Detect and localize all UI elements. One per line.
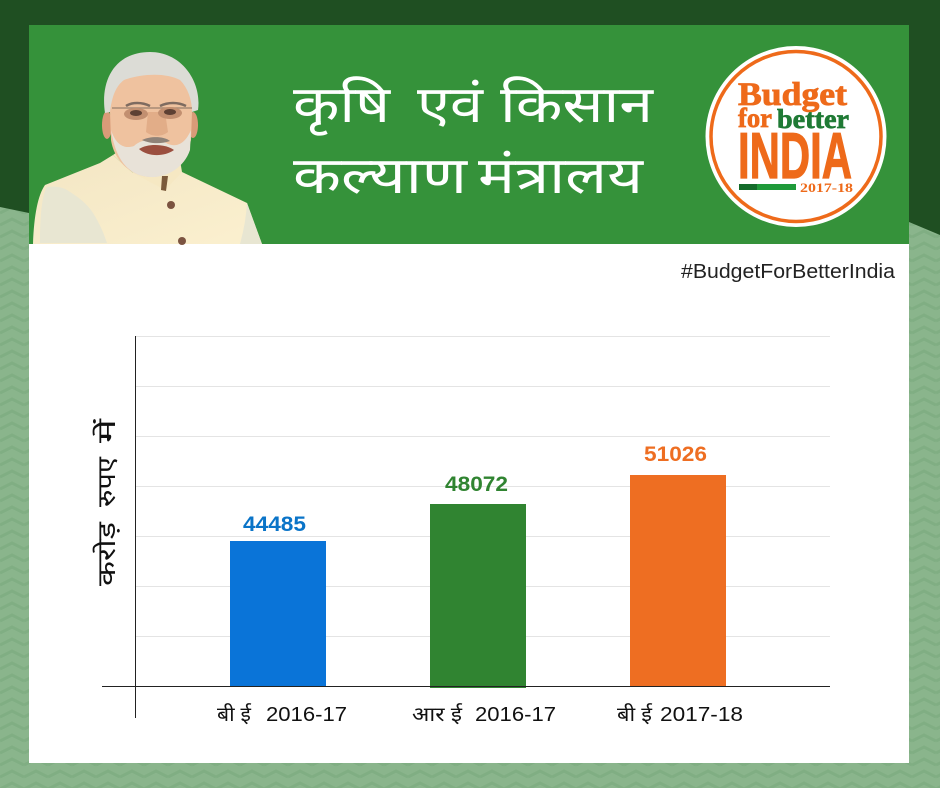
glasses and eyes — [112, 107, 192, 109]
category label: BE 2017-18: 2017-18 — [660, 704, 743, 726]
heading: ministry name — [293, 76, 655, 204]
y axis label: करोड़ — [92, 521, 121, 586]
heading: ministry name: कल्याण — [293, 147, 468, 204]
value: 48072: 48072 — [445, 473, 508, 496]
beard — [111, 130, 191, 177]
axes — [102, 336, 830, 718]
heading: ministry name: कृषि — [293, 76, 392, 136]
value: 44485: 44485 — [243, 513, 306, 536]
ears — [102, 111, 112, 139]
bar: BE 2017-18 — [630, 475, 726, 687]
icon: Budget for better India logo badge: 2017-18 — [800, 180, 854, 195]
y axis label: में — [92, 417, 121, 443]
y axis label — [92, 417, 121, 586]
face — [110, 75, 192, 177]
icon: Budget for better India logo badge: Budget — [738, 77, 847, 113]
icon: Budget for better India logo badge: for — [738, 103, 772, 133]
chart grid lines — [135, 336, 830, 636]
heading: ministry name: किसान — [500, 76, 655, 133]
icon: portrait of man in cream jacket — [33, 52, 262, 245]
icon: Budget for better India logo badge: better — [777, 104, 849, 134]
icon: Budget for better India logo badge: INDIA — [738, 119, 852, 192]
value: 51026: 51026 — [644, 443, 707, 466]
hashtag: #BudgetForBetterIndia — [681, 261, 896, 283]
category label: BE 2017-18 — [617, 703, 743, 726]
bar: BE 2016-17 — [230, 541, 326, 687]
heading: ministry name: मंत्रालय — [478, 147, 645, 204]
y axis label: रुपए — [93, 456, 121, 507]
bar chart — [92, 336, 830, 726]
heading: ministry name: एवं — [417, 76, 485, 133]
panel: green header band — [29, 25, 909, 244]
category label: RE 2016-17: 2016-17 — [475, 704, 556, 726]
bar: RE 2016-17 — [430, 504, 526, 688]
hair — [104, 52, 199, 113]
icon: Budget for better India logo badge — [706, 46, 886, 227]
category label: BE 2016-17: बी ई — [217, 703, 252, 726]
panel: white content card — [29, 244, 909, 763]
category label: BE 2016-17: 2016-17 — [266, 704, 347, 726]
category label: BE 2016-17 — [217, 703, 347, 726]
category label: BE 2017-18: बी ई — [617, 703, 653, 726]
category label: RE 2016-17 — [412, 703, 556, 726]
category label: RE 2016-17: आर ई — [412, 703, 463, 726]
